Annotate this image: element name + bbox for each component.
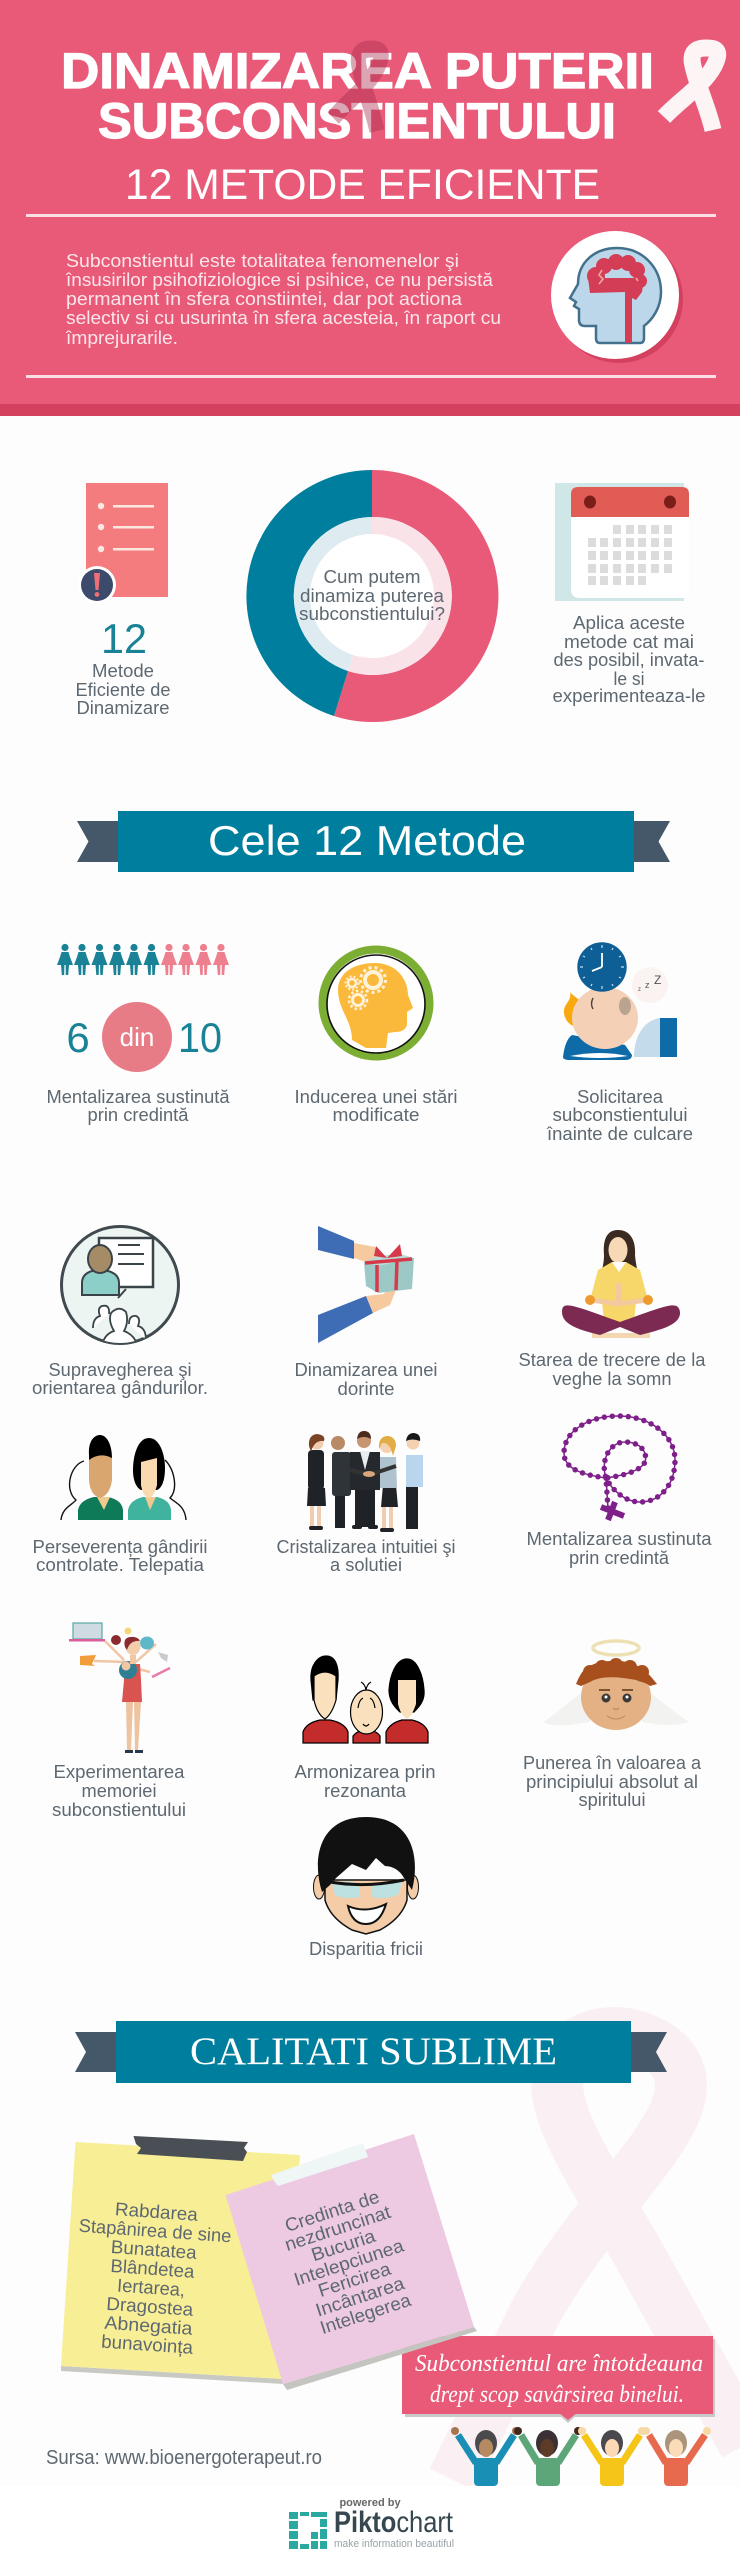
stat: 12 methods: Dinamizare	[76, 697, 170, 718]
method: Punerea in valoare	[523, 1641, 702, 1810]
caption: Cristalizarea intuitiei şi	[276, 1536, 456, 1557]
caption: orientarea gândurilor.	[32, 1377, 208, 1398]
yellow note text	[70, 2196, 233, 2360]
intro text	[65, 250, 501, 348]
pink note text: Intelegerea	[317, 2289, 414, 2338]
stat: 6 din 10: 10	[178, 1014, 222, 1061]
icon: four people with raised arms	[451, 2427, 711, 2486]
icon: ten women pictogram	[57, 944, 229, 975]
caption: Armonizarea prin	[294, 1761, 436, 1782]
calendar caption: des posibil, invata-	[554, 649, 704, 670]
caption: subconstientului	[52, 1799, 186, 1820]
caption: Mentalizarea sustinuta	[526, 1528, 712, 1549]
title	[61, 43, 654, 149]
intro text: selectiv si cu usurinta în sfera acesteia, în raport cu	[66, 307, 501, 328]
icon: angel	[543, 1641, 689, 1730]
intro text: permanent în sfera constiintei, dar pot actiona	[66, 288, 463, 309]
method: Starea de trecere	[518, 1230, 706, 1389]
caption: Dinamizarea unei	[294, 1359, 438, 1380]
method: Cristalizarea	[276, 1431, 456, 1575]
stat: 12 methods: Eficiente de	[76, 679, 170, 700]
title: DINAMIZAREA PUTERII	[61, 43, 654, 99]
yellow note text: Rabdarea	[114, 2198, 199, 2225]
caption	[276, 1536, 456, 1575]
caption	[523, 1752, 702, 1810]
caption: Mentalizarea sustinută	[46, 1086, 230, 1107]
icon: sleeping person with clock	[563, 942, 677, 1060]
icon: couple with silhouettes	[61, 1435, 186, 1520]
callout: Subconstientul are întotdeauna	[415, 2351, 703, 2377]
caption: memoriei	[82, 1780, 156, 1801]
caption	[294, 1359, 438, 1399]
icon: business people	[307, 1431, 423, 1532]
caption: Disparitia fricii	[309, 1938, 423, 1959]
caption	[526, 1528, 712, 1568]
icon: sleeping person with clock: Z	[654, 973, 661, 987]
icon: multitasking woman	[69, 1623, 170, 1753]
caption: dorinte	[338, 1378, 394, 1399]
footer: Piktochart logo: make information beautiful	[334, 2538, 454, 2550]
yellow note text: bunavoința	[101, 2331, 195, 2358]
footer: Piktochart logo: Piktochart	[334, 2506, 454, 2539]
caption: înainte de culcare	[546, 1123, 693, 1144]
intro text: împrejurarile.	[65, 327, 178, 348]
caption: prin credintă	[88, 1104, 189, 1125]
banner: Calitati Sublime	[75, 2021, 667, 2083]
caption	[32, 1536, 208, 1575]
caption: a solutiei	[330, 1554, 402, 1575]
background ribbon	[453, 2033, 740, 2480]
banner: Cele 12 Metode: Cele 12 Metode	[208, 817, 526, 864]
pink note text: Incântarea	[313, 2272, 407, 2321]
donut question: Cum putem	[324, 566, 420, 587]
dark tape	[134, 2136, 248, 2161]
pink note text: nezdruncinat	[282, 2201, 393, 2255]
pink note	[226, 2134, 477, 2390]
caption	[32, 1359, 208, 1398]
calendar caption: le si	[614, 668, 644, 689]
stat: 12 methods: 12	[101, 615, 147, 662]
pink note text: Bucuria	[308, 2225, 378, 2265]
method: Perseverenta	[32, 1435, 208, 1575]
caption: controlate. Telepatia	[36, 1554, 205, 1575]
yellow note text: Dragostea	[106, 2293, 195, 2320]
method: 6 din 10	[46, 944, 230, 1125]
yellow note text: Iertarea,	[117, 2274, 186, 2300]
icon: calendar	[555, 483, 689, 601]
caption: subconstientului	[552, 1104, 688, 1125]
callout	[402, 2336, 715, 2423]
caption: Supravegherea şi	[48, 1359, 192, 1380]
yellow note	[61, 2136, 300, 2384]
calendar caption: metode cat mai	[564, 631, 694, 652]
header panel	[0, 0, 740, 416]
icon: rosary	[564, 1416, 675, 1520]
icon: meditating woman	[562, 1230, 680, 1338]
icon: white ribbon	[664, 48, 718, 130]
method: Disparitia fricii	[309, 1817, 423, 1959]
stat: 6 din 10: 6	[66, 1014, 90, 1061]
icon: family	[303, 1656, 428, 1743]
caption	[294, 1086, 458, 1125]
caption: rezonanta	[324, 1780, 407, 1801]
pink note text	[275, 2183, 424, 2341]
banner: Cele 12 Metode	[77, 811, 670, 872]
icon: faded ribbon over title	[333, 49, 381, 131]
pink note text: Credinta de	[282, 2186, 382, 2236]
icon: smiling boy	[314, 1817, 418, 1934]
stat: 6 din 10: din	[120, 1022, 154, 1052]
donut question: subconstientului?	[299, 603, 445, 624]
yellow note text: Stapânirea de sine	[78, 2215, 232, 2246]
caption: prin credintă	[569, 1547, 670, 1568]
intro text: însusirilor psihofiziologice si psihice, ce nu persistă	[65, 269, 494, 290]
intro text: Subconstientul este totalitatea fenomenelor şi	[66, 250, 459, 271]
pink note text: Fericirea	[315, 2257, 394, 2301]
method: Mentalizarea sustinuta	[526, 1416, 712, 1568]
pink note text: Intelepciunea	[291, 2234, 407, 2290]
donut question: dinamiza puterea	[300, 585, 445, 606]
white tape	[271, 2143, 368, 2186]
caption: Experimentarea	[54, 1761, 185, 1782]
caption: Solicitarea	[577, 1086, 664, 1107]
method: Supravegherea	[32, 1226, 208, 1398]
caption	[546, 1086, 693, 1144]
icon: sleeping person with clock: z	[638, 987, 641, 993]
icon: teacher and audience	[62, 1226, 178, 1350]
donut question	[299, 566, 445, 624]
stat: 12 methods	[76, 615, 170, 718]
caption: Starea de trecere de la	[518, 1349, 706, 1370]
caption: veghe la somn	[552, 1368, 672, 1389]
caption	[52, 1761, 186, 1820]
icon: head with brain	[551, 231, 683, 363]
caption: modificate	[332, 1104, 420, 1125]
donut chart	[246, 470, 498, 722]
calendar caption: experimenteaza-le	[552, 685, 706, 706]
callout: drept scop savârsirea binelui.	[430, 2382, 684, 2408]
yellow note text: Blândetea	[110, 2255, 196, 2282]
icon: list with alert	[78, 483, 168, 604]
method: Armonizarea prin rezonanta	[294, 1656, 436, 1801]
icon: Piktochart mark	[289, 2512, 327, 2549]
stat: 12 methods: Metode	[92, 660, 154, 681]
icon: sleeping person with clock: z	[645, 980, 650, 990]
caption	[518, 1349, 706, 1389]
caption: Perseverența gândirii	[32, 1536, 208, 1557]
caption: spiritului	[578, 1789, 646, 1810]
method: Solicitarea subconstientului	[546, 942, 693, 1144]
caption: principiului absolut al	[526, 1771, 698, 1792]
method: Inducerea unei stari	[294, 950, 458, 1125]
stat: 6 din 10	[66, 1002, 222, 1072]
caption	[294, 1761, 436, 1801]
footer: Piktochart logo	[289, 2497, 454, 2550]
footer: Piktochart logo: powered by	[339, 2497, 401, 2509]
source: Sursa: www.bioenergoterapeut.ro	[46, 2447, 322, 2469]
calendar caption: Aplica aceste	[573, 612, 685, 633]
title: SUBCONSTIENTULUI	[98, 93, 616, 149]
calendar caption	[552, 612, 706, 706]
banner: Calitati Sublime: CALITATI SUBLIME	[190, 2030, 557, 2073]
caption: Inducerea unei stări	[294, 1086, 458, 1107]
caption	[46, 1086, 230, 1125]
icon: gift between hands	[318, 1226, 414, 1343]
icon: head with gears	[322, 950, 430, 1056]
yellow note text: Bunatatea	[110, 2236, 198, 2263]
caption: Punerea în valoarea a	[523, 1752, 702, 1773]
method: Experimentarea memoriei	[52, 1623, 186, 1820]
subtitle: 12 METODE EFICIENTE	[125, 161, 600, 209]
yellow note text: Abnegatia	[104, 2312, 194, 2339]
method: Dinamizarea unei dorinte	[294, 1226, 438, 1399]
